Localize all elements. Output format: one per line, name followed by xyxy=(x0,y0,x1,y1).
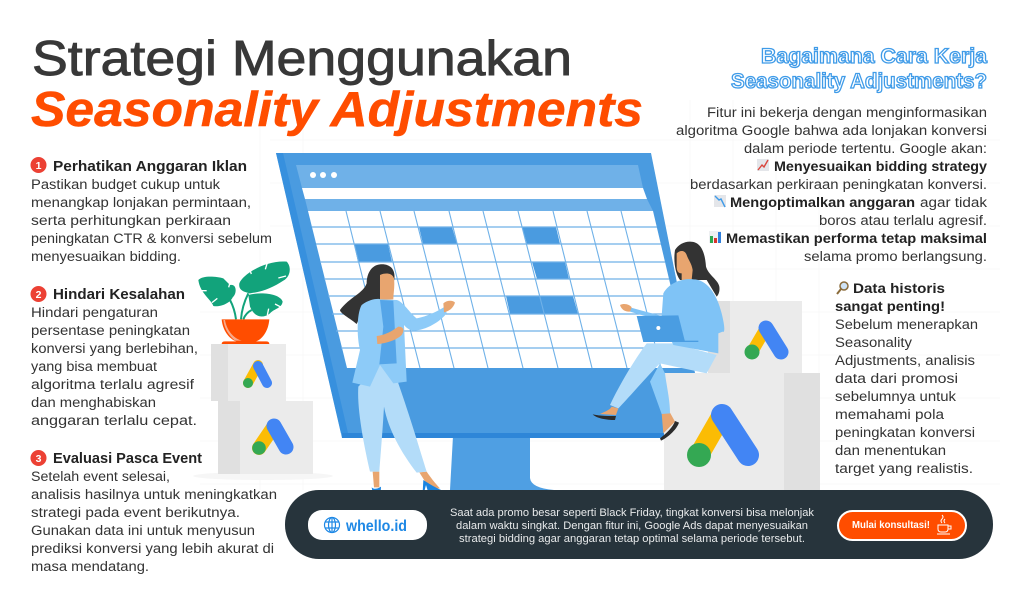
tip 2: hindari kesalahan: dan menghabiskan xyxy=(31,395,156,411)
tip 3: evaluasi pasca event: Gunakan data ini untuk menyusun xyxy=(31,523,255,539)
tip 3: evaluasi pasca event: prediksi konversi yang lebih akurat di xyxy=(31,541,274,557)
illustration: standing woman xyxy=(340,264,455,493)
icon: potted plant xyxy=(198,262,290,344)
tip 3: evaluasi pasca event xyxy=(30,450,277,575)
logo pill: whello.id: whello.id xyxy=(345,518,407,535)
tip 3: evaluasi pasca event: 3 xyxy=(36,453,42,465)
footer bar xyxy=(285,490,993,559)
text block: historical data: Data historis xyxy=(853,281,945,297)
monitor stand xyxy=(450,436,554,490)
tip 1: perhatikan anggaran iklan: 1 xyxy=(36,160,42,172)
tip 3: evaluasi pasca event: Setelah event selesai, xyxy=(31,469,170,485)
tip 1: perhatikan anggaran iklan: Pastikan budget cukup untuk xyxy=(31,177,221,193)
tip 2: hindari kesalahan: 2 xyxy=(36,289,42,301)
tip 1: perhatikan anggaran iklan: peningkatan CTR & konversi sebelum xyxy=(31,231,272,247)
tip 3: evaluasi pasca event: Evaluasi Pasca Event xyxy=(53,451,202,467)
tip 1: perhatikan anggaran iklan: menangkap lonjakan permintaan, xyxy=(31,195,251,211)
panel: left tips xyxy=(30,157,277,575)
tip 2: hindari kesalahan: anggaran terlalu cepat. xyxy=(31,413,197,429)
tip 1: perhatikan anggaran iklan: menyesuaikan bidding. xyxy=(31,249,181,265)
footer text: dalam waktu singkat. Dengan fitur ini, Google Ads dapat menyesuaikan xyxy=(456,520,808,532)
text block: historical data: sebelumnya untuk xyxy=(835,389,957,405)
footer text xyxy=(450,507,815,545)
tip 1: perhatikan anggaran iklan xyxy=(30,157,272,265)
tip 2: hindari kesalahan: Hindari pengaturan xyxy=(31,305,158,321)
text block: how it works: berdasarkan perkiraan peningkatan konversi. xyxy=(690,177,987,193)
text block: historical data: Seasonality xyxy=(835,335,913,351)
tip 2: hindari kesalahan: persentase peningkatan xyxy=(31,323,190,339)
monitor frame xyxy=(276,153,708,438)
tip 1: perhatikan anggaran iklan: serta perhitungkan perkiraan xyxy=(31,213,231,229)
text block: how it works: algoritma Google bahwa ada lonjakan konversi xyxy=(676,123,987,139)
right heading: Bagaimana Cara Kerja xyxy=(761,45,987,68)
icon: chart down xyxy=(714,195,726,207)
tip 1: perhatikan anggaran iklan: Perhatikan Anggaran Iklan xyxy=(53,159,247,175)
logo pill: whello.id xyxy=(308,510,427,540)
text block: historical data: target yang realistis. xyxy=(835,461,973,477)
text block: historical data: Sebelum menerapkan xyxy=(835,317,978,333)
tip 3: evaluasi pasca event: strategi pada event berikutnya. xyxy=(31,505,240,521)
text block: historical data xyxy=(835,281,978,477)
title: Strategi Menggunakan xyxy=(32,32,572,86)
icon: magnifier xyxy=(837,282,848,294)
illustration: sitting woman with laptop xyxy=(593,242,724,441)
tip 2: hindari kesalahan: algoritma terlalu agresif xyxy=(31,377,194,393)
right heading xyxy=(731,45,987,93)
illustration: monitor xyxy=(276,153,708,490)
title: Seasonality Adjustments xyxy=(31,83,643,137)
box large xyxy=(218,401,313,474)
icon: coffee cup xyxy=(937,515,951,534)
text block: historical data: dan menentukan xyxy=(835,443,946,459)
text block: how it works: selama promo berlangsung. xyxy=(804,249,987,265)
text block: how it works: Memastikan performa tetap maksimal xyxy=(726,231,987,247)
right heading: Seasonality Adjustments? xyxy=(731,70,987,93)
text block: how it works: Menyesuaikan bidding strategy xyxy=(774,159,987,175)
tip 2: hindari kesalahan: Hindari Kesalahan xyxy=(53,287,185,303)
text block: historical data: memahami pola xyxy=(835,407,944,423)
tip 2: hindari kesalahan: konversi yang berlebihan, xyxy=(31,341,198,357)
illustration: right boxes xyxy=(664,301,820,493)
text block: how it works: boros atau terlalu agresif. xyxy=(819,213,987,229)
text block: how it works: Mengoptimalkan anggaran xyxy=(730,195,915,211)
text block: historical data: peningkatan konversi xyxy=(835,425,975,441)
box lower xyxy=(664,373,820,493)
button: mulai konsultasi: Mulai konsultasi! xyxy=(852,520,930,531)
icon: bar chart xyxy=(709,231,721,243)
text block: how it works: dalam periode tertentu. Google akan: xyxy=(744,141,987,157)
footer text: Saat ada promo besar seperti Black Friday, tingkat konversi bisa melonjak xyxy=(450,507,815,519)
tip 3: evaluasi pasca event: masa mendatang. xyxy=(31,559,149,575)
spreadsheet grid xyxy=(308,211,690,368)
illustration: left plant and boxes xyxy=(193,262,333,480)
box upper xyxy=(708,301,802,374)
tip 3: evaluasi pasca event: analisis hasilnya untuk meningkatkan xyxy=(31,487,277,503)
tip 2: hindari kesalahan: yang bisa membuat xyxy=(31,359,157,375)
tip 2: hindari kesalahan xyxy=(30,286,198,429)
text block: how it works: Fitur ini bekerja dengan menginformasikan xyxy=(707,105,987,121)
text block: how it works: agar tidak xyxy=(920,195,988,211)
button: mulai konsultasi xyxy=(838,511,966,540)
title xyxy=(31,32,643,137)
text block: historical data: data dari promosi xyxy=(835,371,958,387)
icon: chart up xyxy=(757,159,769,171)
icon: globe xyxy=(324,517,340,533)
text block: historical data: sangat penting! xyxy=(835,299,945,315)
text block: historical data: Adjustments, analisis xyxy=(835,353,975,369)
text block: how it works xyxy=(676,105,988,265)
footer text: strategi bidding agar anggaran tetap optimal selama periode tersebut. xyxy=(459,533,805,545)
box small xyxy=(211,344,286,401)
